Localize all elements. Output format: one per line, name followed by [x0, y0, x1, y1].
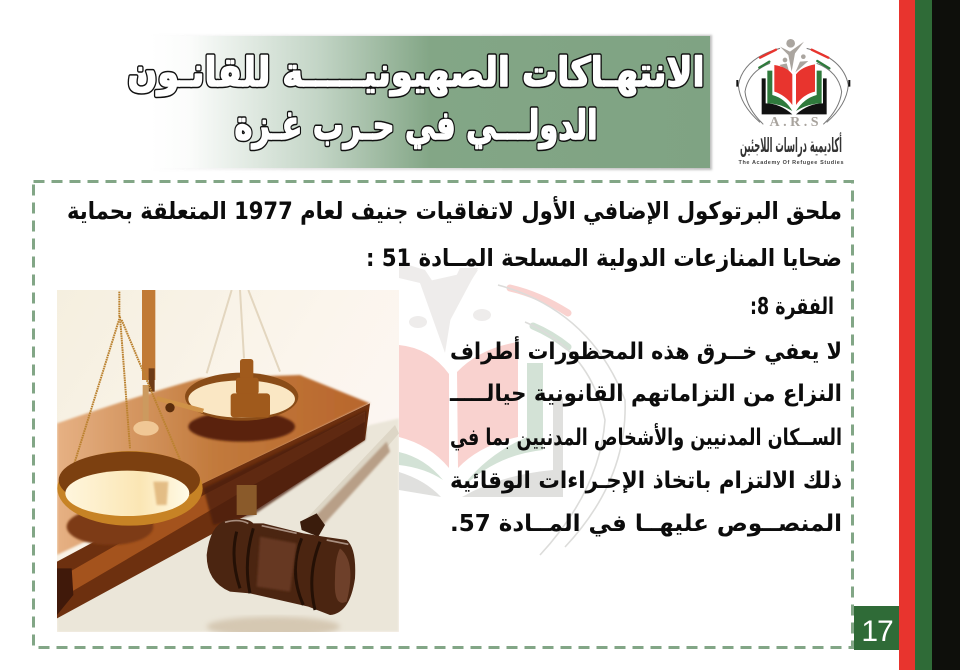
body text: paragraph 8: لا يعفي خــرق هذه المحظورات أطراف — [450, 335, 842, 365]
big pan — [57, 451, 203, 526]
body text: heading paragraph: ضحايا المنازعات الدولية المسلحة المــادة 51 : — [366, 244, 842, 272]
logo english name: The Academy Of Refugee Studies — [738, 160, 844, 166]
stand — [142, 290, 155, 380]
body text: paragraph 8 — [449, 294, 842, 537]
right stripes — [899, 0, 960, 670]
page number — [854, 606, 899, 650]
body text: paragraph 8: المنصــوص عليهــا في المــادة 57. — [450, 511, 842, 537]
title text — [128, 50, 704, 149]
title text: الدولـــي في حـرب غـزة — [234, 103, 598, 149]
shadow under big pan — [65, 514, 154, 546]
body text: paragraph 8: الســكان المدنيين والأشخاص المدنيين بما في — [450, 422, 842, 451]
body text: paragraph 8: الفقرة 8: — [750, 294, 834, 320]
weights — [231, 359, 270, 417]
watermark logo — [399, 262, 625, 555]
gavel head — [207, 519, 355, 615]
dashed content frame — [34, 182, 852, 648]
book side — [57, 403, 370, 618]
page number: 17 — [861, 615, 893, 648]
logo — [737, 39, 849, 166]
title banner — [128, 35, 712, 170]
logo mark — [737, 39, 849, 124]
chains — [74, 292, 182, 462]
body text: paragraph 8: النزاع من التزاماتهم القانونية حيالـــــ — [449, 381, 842, 407]
body text: heading paragraph — [67, 196, 842, 272]
title text: الانتهـاكات الصهيونيـــــة للقانـون — [128, 50, 704, 96]
back strings — [207, 290, 280, 373]
body text: paragraph 8: ذلك الالتزام باتخاذ الإجـراءات الوقائية — [450, 468, 842, 494]
gavel handle — [307, 425, 399, 525]
title text: الدولـــي في حـرب غـزة — [234, 103, 598, 149]
photo: scales and gavel — [57, 290, 399, 637]
title text: الانتهـاكات الصهيونيـــــة للقانـون — [128, 50, 704, 96]
back pan — [188, 412, 295, 442]
logo A.R.S: A.R.S — [770, 115, 819, 130]
body text: heading paragraph: ملحق البرتوكول الإضافي الأول لاتفاقيات جنيف لعام 1977 المتعلقة بحماية — [67, 196, 842, 225]
book top — [57, 375, 370, 555]
